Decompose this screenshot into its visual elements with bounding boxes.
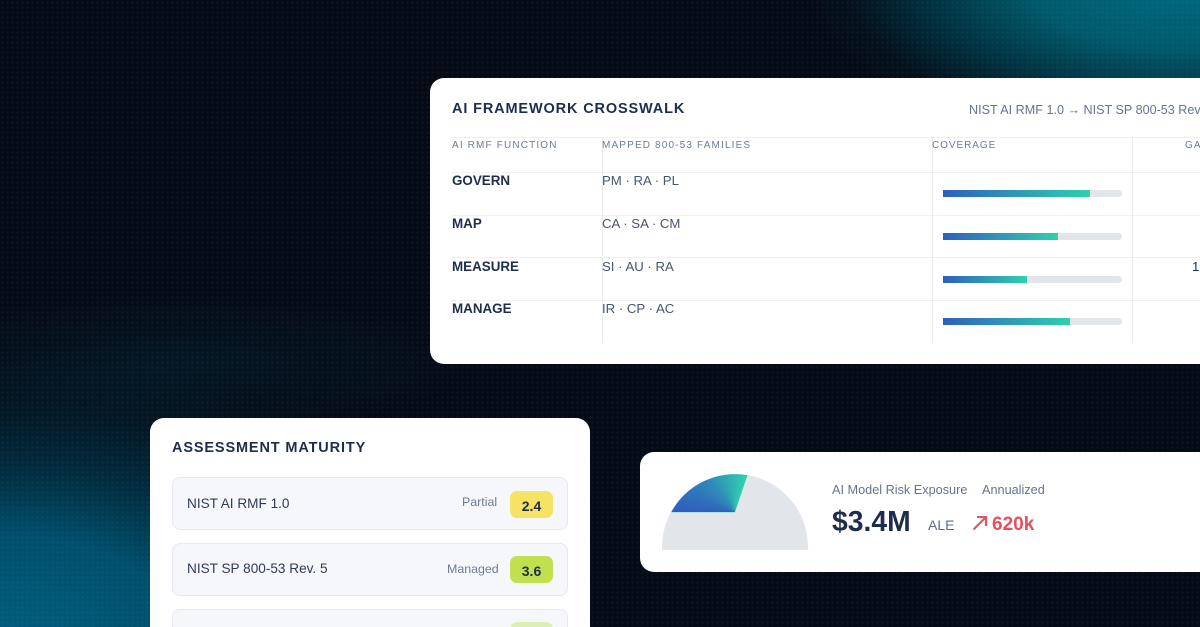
score badge: 3.6: [522, 563, 541, 579]
row: manage: MANAGE: [452, 301, 512, 316]
row: NIST SP 800-53: Managed: [447, 562, 499, 576]
row: measure: [452, 259, 1200, 283]
row: govern: PM · RA · PL: [602, 173, 679, 188]
row: govern: GOVERN: [452, 173, 510, 188]
row: NIST AI RMF: NIST AI RMF 1.0: [187, 496, 289, 511]
row: govern: [452, 173, 1122, 197]
icon: up-right arrow: [972, 516, 988, 530]
score badge: [510, 622, 553, 627]
table header: COVERAGE: [932, 140, 996, 151]
unit: ALE: ALE: [928, 517, 954, 533]
panel: AI model risk exposure: [640, 452, 1200, 572]
row: third, cropped: [172, 609, 568, 627]
row: NIST SP 800-53: [172, 543, 568, 596]
chart: semicircle gauge: [662, 474, 808, 550]
table header: AI RMF FUNCTION: [452, 140, 558, 151]
score badge: [510, 556, 553, 583]
row: map: [452, 216, 1122, 240]
row: NIST AI RMF: Partial: [462, 495, 497, 509]
row: NIST SP 800-53: NIST SP 800-53 Rev. 5: [187, 561, 328, 576]
row: manage: [452, 301, 1122, 325]
row: NIST AI RMF: [172, 477, 568, 530]
gauge track: [662, 474, 808, 550]
gauge value sector: [671, 474, 748, 512]
table header: [452, 140, 1200, 151]
score badge: 2.4: [522, 498, 541, 514]
delta: up 620k: [972, 514, 1034, 535]
value: 3.4M: $3.4M: [832, 505, 911, 537]
label: exposure: AI Model Risk Exposure: [832, 483, 967, 497]
row: measure: MEASURE: [452, 259, 519, 274]
row: map: MAP: [452, 216, 482, 231]
panel: assessment maturity: [150, 418, 590, 627]
table header: MAPPED 800-53 FAMILIES: [602, 140, 751, 151]
score badge: [510, 491, 553, 518]
label: annualized: Annualized: [982, 483, 1045, 497]
row: measure: SI · AU · RA: [602, 259, 674, 274]
panel: AI framework crosswalk: [430, 78, 1200, 364]
delta: up 620k: 620k: [992, 514, 1034, 535]
row: manage: IR · CP · AC: [602, 301, 674, 316]
row: map: CA · SA · CM: [602, 216, 680, 231]
heading: maturity: ASSESSMENT MATURITY: [172, 440, 366, 456]
heading: crosswalk: AI FRAMEWORK CROSSWALK: [452, 101, 685, 117]
